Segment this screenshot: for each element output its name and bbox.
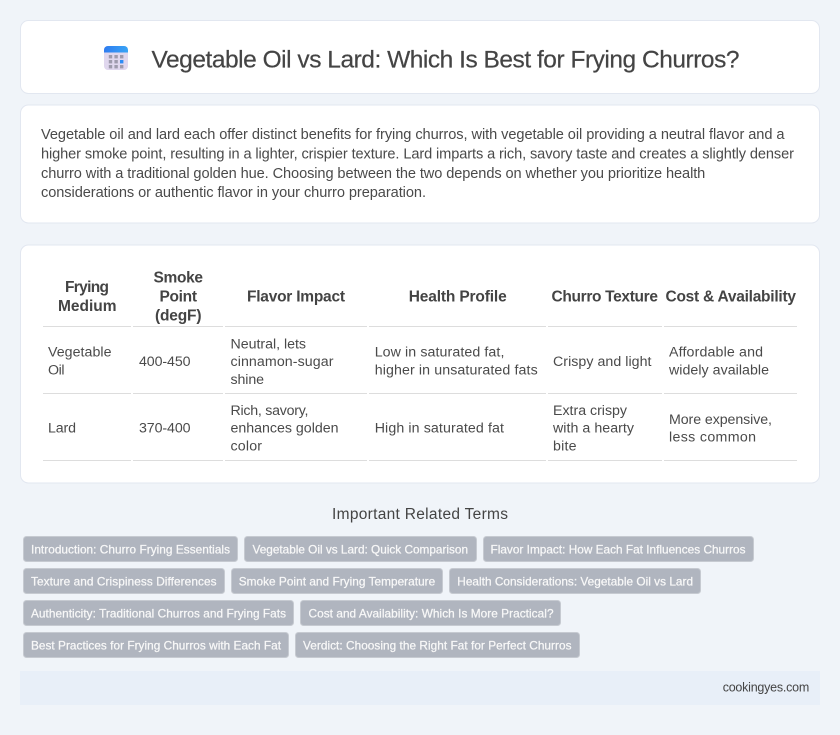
table header row: (degF) bbox=[155, 308, 202, 324]
table row: vegetable oil: shine bbox=[230, 372, 264, 388]
tag: authenticity bbox=[24, 600, 294, 626]
table row: vegetable oil: Oil bbox=[48, 363, 64, 379]
table header row: Point bbox=[160, 288, 197, 306]
table header row: Health Profile bbox=[409, 288, 507, 306]
tag: texture bbox=[24, 568, 224, 594]
tag: verdict bbox=[296, 632, 580, 658]
tag: health bbox=[450, 568, 700, 594]
tag: best practices bbox=[24, 632, 288, 658]
tag: best practices: Best Practices for Frying Churros with Each Fat bbox=[31, 638, 282, 652]
footer bar bbox=[20, 671, 820, 705]
tag: health: Health Considerations: Vegetable Oil vs Lard bbox=[457, 574, 693, 588]
tag: introduction bbox=[24, 536, 238, 562]
table row: lard: Rich, savory, bbox=[230, 403, 308, 419]
table row: lard: Lard bbox=[48, 421, 76, 437]
heading: important related terms: Important Related Terms bbox=[332, 506, 508, 523]
summary text: higher smoke point, resulting in a lighter, crispier texture. Lard imparts a rich, savory taste and creates a slightly denser bbox=[41, 146, 794, 162]
table row: vegetable oil bbox=[48, 336, 769, 388]
panel: comparison table bbox=[20, 245, 820, 483]
table row: vegetable oil: Crispy and light bbox=[553, 354, 652, 370]
header panel bbox=[20, 20, 820, 94]
tag: quick comparison: Vegetable Oil vs Lard: Quick Comparison bbox=[252, 542, 468, 556]
table row: lard: 370-400 bbox=[139, 421, 191, 437]
table row: vegetable oil: Vegetable bbox=[48, 345, 112, 361]
table row: lard: High in saturated fat bbox=[375, 421, 504, 437]
table header row bbox=[58, 270, 796, 324]
tag: flavor impact: Flavor Impact: How Each Fat Influences Churros bbox=[490, 542, 746, 556]
summary text bbox=[41, 127, 794, 201]
tag: verdict: Verdict: Choosing the Right Fat for Perfect Churros bbox=[303, 638, 572, 652]
table row: lard: Extra crispy bbox=[553, 403, 628, 419]
table row: lard: enhances golden bbox=[230, 421, 338, 437]
summary text: churro with a traditional golden hue. Choosing between the two depends on whether you prioritize health bbox=[41, 166, 705, 182]
table row: lard: less common bbox=[669, 430, 756, 446]
table row: vegetable oil: 400-450 bbox=[139, 354, 191, 370]
tag: quick comparison bbox=[244, 536, 476, 562]
icon: calendar bbox=[104, 46, 128, 70]
table row: vegetable oil: widely available bbox=[668, 363, 769, 379]
title: Vegetable Oil vs Lard: Which Is Best for Frying Churros? bbox=[152, 46, 740, 74]
tag: texture: Texture and Crispiness Differences bbox=[31, 574, 217, 588]
table row: vegetable oil: Affordable and bbox=[669, 345, 763, 361]
tag: cost: Cost and Availability: Which Is More Practical? bbox=[308, 606, 554, 620]
summary text: considerations or authentic flavor in your churro preparation. bbox=[41, 185, 426, 201]
tag: cost bbox=[300, 600, 560, 626]
tag: smoke point: Smoke Point and Frying Temperature bbox=[239, 574, 436, 588]
table header row: Flavor Impact bbox=[247, 288, 345, 306]
table header row: Medium bbox=[58, 298, 116, 315]
table row: vegetable oil: cinnamon-sugar bbox=[230, 354, 334, 370]
table header row: Cost & Availability bbox=[666, 288, 796, 306]
panel: summary paragraph bbox=[20, 105, 820, 223]
related term tags bbox=[24, 536, 754, 658]
table row: lard: color bbox=[230, 439, 262, 455]
tag: authenticity: Authenticity: Traditional Churros and Frying Fats bbox=[31, 606, 286, 620]
table row: lard bbox=[48, 403, 772, 455]
table row: vegetable oil: Low in saturated fat, bbox=[375, 345, 504, 361]
table row: lard: bite bbox=[553, 439, 577, 455]
tag: introduction: Introduction: Churro Frying Essentials bbox=[31, 542, 230, 556]
tag: smoke point bbox=[232, 568, 442, 594]
tag: flavor impact bbox=[484, 536, 754, 562]
table header row: Churro Texture bbox=[552, 288, 658, 306]
table row: lard: More expensive, bbox=[669, 412, 772, 428]
table header row: Frying bbox=[65, 279, 109, 296]
table row: vegetable oil: Neutral, lets bbox=[230, 336, 306, 352]
summary text: Vegetable oil and lard each offer distinct benefits for frying churros, with vegetable oil providing a neutral flavor and a bbox=[41, 127, 785, 143]
table row: lard: with a hearty bbox=[552, 421, 635, 437]
footer source: cookingyes.com bbox=[723, 681, 809, 695]
table header row: Smoke bbox=[154, 270, 203, 286]
table row: vegetable oil: higher in unsaturated fats bbox=[375, 363, 538, 379]
